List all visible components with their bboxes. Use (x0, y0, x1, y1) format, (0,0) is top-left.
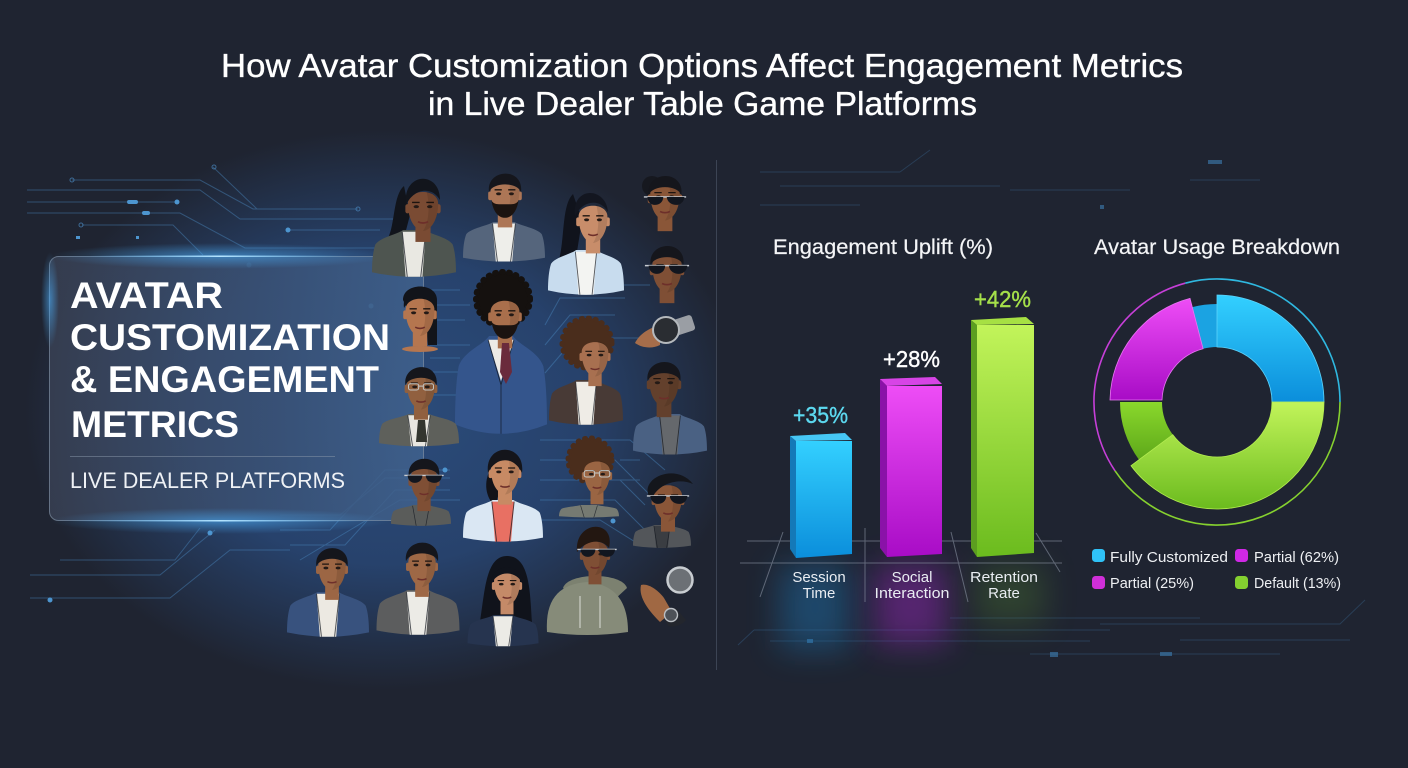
segment: blue (1217, 295, 1324, 402)
avatar: woman light blazer ponytail (548, 193, 624, 295)
avatar: head with sunglasses (645, 246, 689, 303)
avatar: man hoodie sunglasses (547, 527, 628, 635)
card subtitle: LIVE DEALER PLATFORMS (70, 468, 345, 493)
avatar: long-haired woman navy blazer (468, 556, 538, 646)
bar: session time: Time (803, 585, 835, 602)
legend item: partial 25: Partial (25%) (1110, 575, 1194, 592)
circuit pattern: right panel (738, 150, 1365, 654)
bar: session time: Session (792, 569, 846, 586)
segment: small blue (1192, 304, 1217, 349)
chart grid floor (740, 528, 1062, 602)
icon: wristwatch (635, 314, 696, 347)
segment: green (1131, 402, 1324, 509)
bar: session time (790, 402, 852, 602)
bar: social interaction (874, 346, 950, 602)
bar: social interaction: +28% (883, 346, 940, 372)
icon: hand with watch and clock (641, 568, 692, 627)
legend (1092, 549, 1341, 592)
avatar: woman grey blazer ponytail (372, 179, 456, 277)
donut chart: avatar usage (1094, 279, 1340, 525)
avatar: head with sunglasses and bun (642, 176, 686, 231)
title: How Avatar Customization Options Affect Engagement Metrics (221, 47, 1183, 84)
title (221, 47, 1183, 122)
bar: social interaction: Interaction (874, 585, 950, 602)
segment: small green (1120, 402, 1173, 460)
bar chart: engagement uplift (790, 286, 1038, 602)
avatar: central afro man navy suit (455, 272, 547, 434)
avatar: man slate jacket (463, 174, 545, 262)
card heading: AVATAR (70, 275, 223, 316)
card heading: & ENGAGEMENT (70, 359, 379, 400)
card heading: METRICS (71, 404, 239, 445)
bar: session time: +35% (793, 402, 848, 428)
avatar: man grey tweed jacket (376, 543, 460, 635)
card heading: CUSTOMIZATION (70, 317, 390, 358)
legend item: partial 62: Partial (62%) (1254, 549, 1339, 566)
outer ring (1094, 279, 1340, 525)
heading: avatar usage breakdown: Avatar Usage Breakdown (1094, 236, 1340, 259)
avatar: man blue-grey jacket (633, 362, 707, 455)
circuit pattern: left panel (27, 167, 690, 598)
avatar: woman head (402, 286, 438, 352)
avatar grid (287, 174, 707, 646)
heading: engagement uplift: Engagement Uplift (%) (773, 236, 993, 259)
panel: left avatar showcase (27, 147, 716, 672)
title: in Live Dealer Table Game Platforms (428, 85, 977, 122)
avatar: man glasses grey jacket (379, 367, 459, 446)
avatar: man swept hair sunglasses (633, 473, 693, 548)
bar: retention rate (970, 286, 1038, 602)
panel: title card (41, 243, 424, 534)
avatar: woman white blazer coral top (463, 450, 543, 542)
bar: retention rate: Retention (970, 569, 1038, 586)
avatar: man sunglasses grey top (391, 459, 451, 526)
avatar: man navy jacket (287, 548, 369, 637)
chart glows under bars (780, 565, 1045, 650)
legend item: default 13: Default (13%) (1254, 575, 1341, 592)
card heading (70, 275, 390, 445)
avatar: curly-hair man clear glasses (559, 438, 619, 517)
bar: retention rate: Rate (988, 585, 1020, 602)
avatar: curly-hair man brown jacket (549, 318, 623, 425)
bar: retention rate: +42% (974, 286, 1031, 312)
legend item: fully customized: Fully Customized (1110, 549, 1228, 566)
vertical divider (716, 160, 717, 670)
segment: purple (1110, 298, 1203, 400)
bar: social interaction: Social (892, 569, 932, 586)
